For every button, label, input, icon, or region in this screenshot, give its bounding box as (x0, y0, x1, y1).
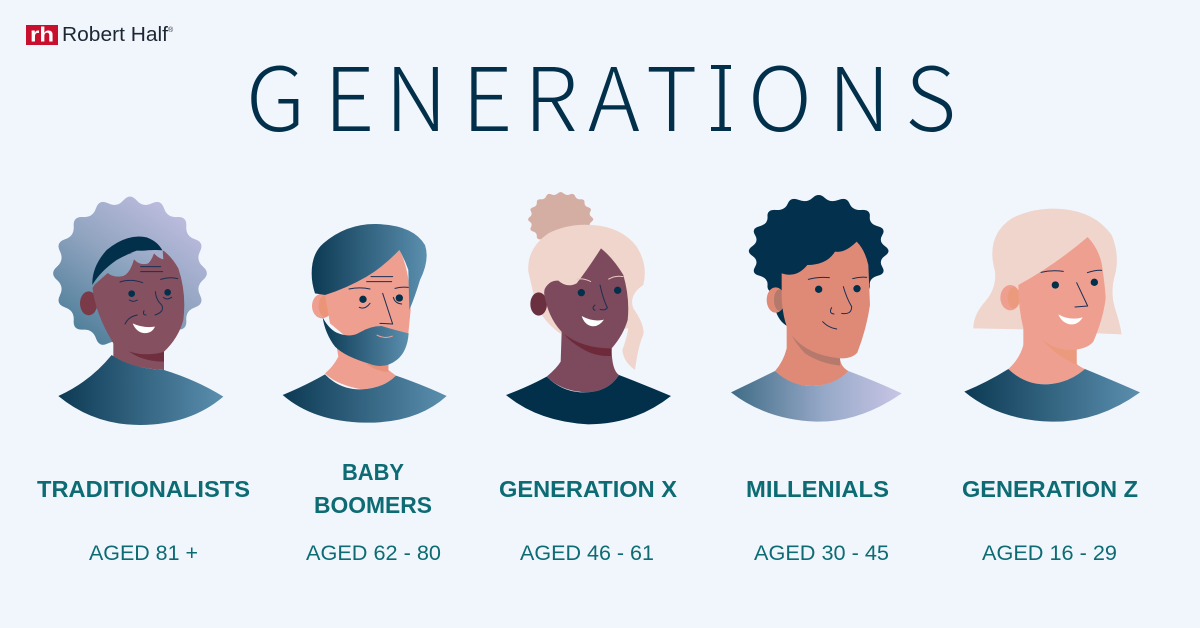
smile (582, 316, 604, 326)
eyes (1052, 279, 1098, 289)
portrait: millenial (731, 195, 902, 422)
age: AGED 46 - 61 (520, 541, 654, 565)
ear (1000, 285, 1020, 310)
portrait: generation x (506, 192, 671, 424)
name (314, 459, 432, 518)
shirt (964, 369, 1140, 422)
facial lines (349, 277, 408, 324)
shirt (506, 375, 671, 424)
nape hair (775, 308, 788, 327)
eyes (815, 285, 861, 293)
panel: generation x (499, 192, 678, 565)
fringe (92, 250, 163, 288)
ear (80, 291, 97, 315)
logo: Robert Half (26, 24, 174, 46)
eyebrows (577, 276, 623, 282)
neck (1008, 328, 1085, 384)
smile (133, 323, 155, 333)
mouth (377, 335, 393, 337)
hair (973, 209, 1122, 334)
smile (1058, 314, 1083, 324)
chin shadow (563, 333, 612, 356)
panel: millenials (731, 195, 902, 565)
panel: traditionalists (37, 196, 250, 565)
beard (323, 317, 409, 366)
shirt (58, 355, 223, 425)
face (1018, 237, 1106, 350)
shirt (731, 371, 902, 422)
chin shadow (792, 335, 840, 366)
face (782, 242, 870, 358)
headband (92, 237, 163, 285)
face (544, 248, 628, 348)
registered mark: ® (168, 26, 174, 34)
hair (749, 195, 889, 307)
eyes (578, 287, 621, 296)
hair (53, 196, 207, 350)
nose (593, 285, 607, 310)
logo mark (26, 24, 58, 46)
hair (528, 225, 645, 370)
facial lines (1041, 270, 1102, 307)
name: BABY (342, 459, 404, 485)
name: TRADITIONALISTS (37, 476, 250, 502)
face (92, 251, 184, 354)
ear (767, 287, 785, 313)
eyes (128, 289, 171, 297)
shirt (283, 374, 447, 423)
age: AGED 62 - 80 (306, 541, 441, 565)
portrait: generation z (964, 209, 1140, 422)
hair (312, 224, 427, 310)
neck shadow (367, 364, 388, 372)
hair bun (528, 192, 593, 247)
portrait: baby boomer (283, 224, 447, 423)
age: AGED 81 + (89, 541, 198, 565)
ear (312, 294, 332, 318)
name: GENERATION Z (962, 476, 1138, 502)
neck (325, 347, 396, 389)
neck (775, 325, 848, 386)
chin shadow (1042, 340, 1077, 365)
ear (530, 292, 547, 316)
age: AGED 16 - 29 (982, 541, 1117, 565)
age: AGED 30 - 45 (754, 541, 889, 565)
name: BOOMERS (314, 492, 432, 518)
facial lines (120, 267, 178, 324)
face (325, 250, 411, 357)
logo mark: rh (30, 24, 54, 46)
facial lines (808, 277, 867, 329)
panel: baby boomers (283, 224, 447, 565)
chin shadow (125, 348, 164, 362)
title: GENERATIONS (246, 30, 956, 157)
neck (113, 340, 164, 370)
name: MILLENIALS (746, 476, 889, 502)
eyes (359, 294, 403, 303)
portrait: traditionalist (53, 196, 223, 425)
name: GENERATION X (499, 476, 678, 502)
panel: generation z (962, 209, 1140, 565)
neck (547, 332, 619, 392)
logo wordmark: Robert Half (62, 24, 168, 46)
